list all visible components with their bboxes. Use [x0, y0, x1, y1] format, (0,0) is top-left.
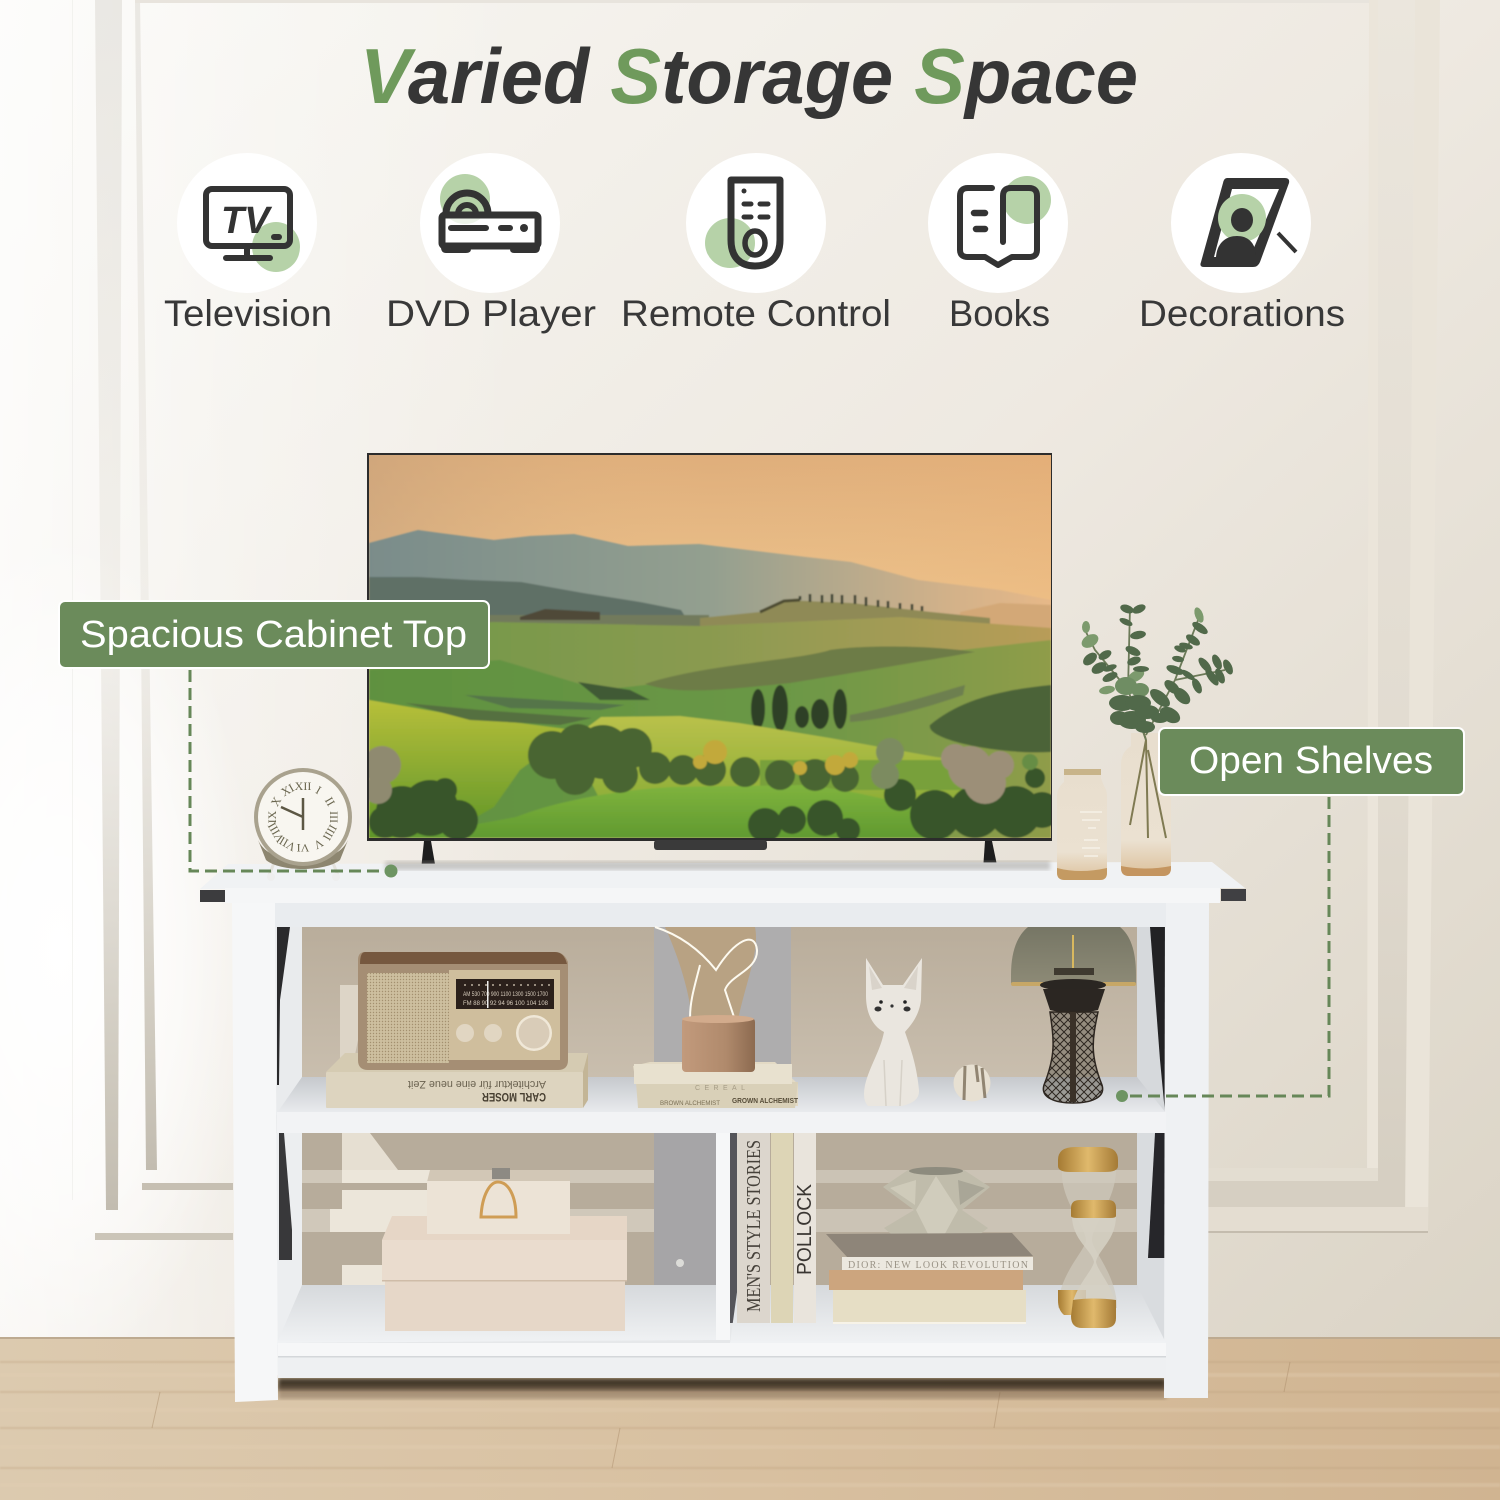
icon: television: TV — [221, 200, 272, 242]
legs — [232, 903, 1209, 1402]
radio on book — [326, 952, 588, 1108]
clock: II — [322, 795, 338, 808]
radio on book: Architektur für eine neue Zeit — [408, 1078, 546, 1090]
clock: I — [313, 783, 324, 797]
icon: television — [177, 153, 317, 293]
ribbon sculpture on books: GROWN ALCHEMIST — [732, 1098, 799, 1105]
vertical books: MEN'S STYLE STORIES — [743, 1140, 765, 1312]
icon: books — [928, 153, 1068, 293]
clock: VIII — [265, 820, 287, 845]
clock: VI — [297, 841, 309, 855]
top apron — [275, 903, 1166, 927]
white fox figurine — [864, 958, 922, 1106]
radio on book: FM 88 90 92 94 96 100 104 108 — [463, 1001, 549, 1007]
glass jar — [1057, 769, 1107, 880]
hourglasses — [1058, 1147, 1118, 1328]
back panels of compartments — [275, 925, 1166, 1375]
TV console — [200, 862, 1246, 1402]
horizontal book stack — [826, 1233, 1033, 1324]
title: Varied Storage Space — [360, 32, 1138, 120]
label: books: Books — [949, 293, 1050, 334]
icon: remote control — [686, 153, 826, 293]
striped ball — [954, 1064, 990, 1102]
middle shelf — [277, 1077, 1166, 1133]
black x-braces — [275, 927, 1166, 1345]
television with landscape on screen — [363, 453, 1060, 877]
radio on book: AM 530 700 900 1100 1300 1500 1700 — [463, 992, 549, 998]
ribbon sculpture on books: BROWN ALCHEMIST — [660, 1101, 720, 1107]
clock: V — [311, 836, 326, 852]
tabletop — [200, 862, 1246, 903]
clock: XII — [295, 779, 311, 793]
ribbon sculpture on books — [633, 927, 799, 1108]
clock: VII — [277, 834, 298, 854]
icon: picture frame decoration — [1171, 153, 1311, 293]
callout: spacious cabinet top: Spacious Cabinet Top — [80, 614, 467, 656]
table lamp with mesh base — [1011, 927, 1136, 1103]
horizontal book stack: DIOR: NEW LOOK REVOLUTION — [848, 1260, 1028, 1271]
icon: DVD player — [420, 153, 560, 293]
clock: IX — [265, 810, 279, 823]
callout: open shelves: Open Shelves — [1189, 740, 1433, 782]
vertical books — [737, 1133, 816, 1323]
clock — [254, 768, 352, 881]
ribbon sculpture on books: CEREAL — [695, 1085, 745, 1092]
label: DVD player: DVD Player — [386, 293, 596, 334]
connector: spacious cabinet top — [190, 670, 398, 878]
callout: spacious cabinet top — [59, 601, 489, 668]
bottom shelf — [277, 1285, 1166, 1378]
wooden floor — [0, 1337, 1500, 1500]
label: television: Television — [164, 293, 332, 334]
radio on book: CARL MOSER — [482, 1090, 546, 1104]
TV stand shadow on tabletop — [385, 861, 1050, 870]
clock: IIII — [320, 822, 340, 843]
vertical books: POLLOCK — [794, 1183, 816, 1275]
clock: III — [327, 811, 341, 823]
stacked storage boxes — [382, 1168, 627, 1331]
label: remote control: Remote Control — [621, 293, 891, 334]
label: decorations: Decorations — [1139, 293, 1345, 334]
console shadow on floor — [278, 1378, 1166, 1399]
eucalyptus in glass vase — [1079, 602, 1235, 876]
clock: XI — [279, 781, 296, 799]
callout: open shelves — [1159, 728, 1464, 795]
concrete geometric vase — [883, 1167, 990, 1250]
connector: open shelves — [1116, 797, 1329, 1102]
clock: X — [268, 794, 284, 809]
